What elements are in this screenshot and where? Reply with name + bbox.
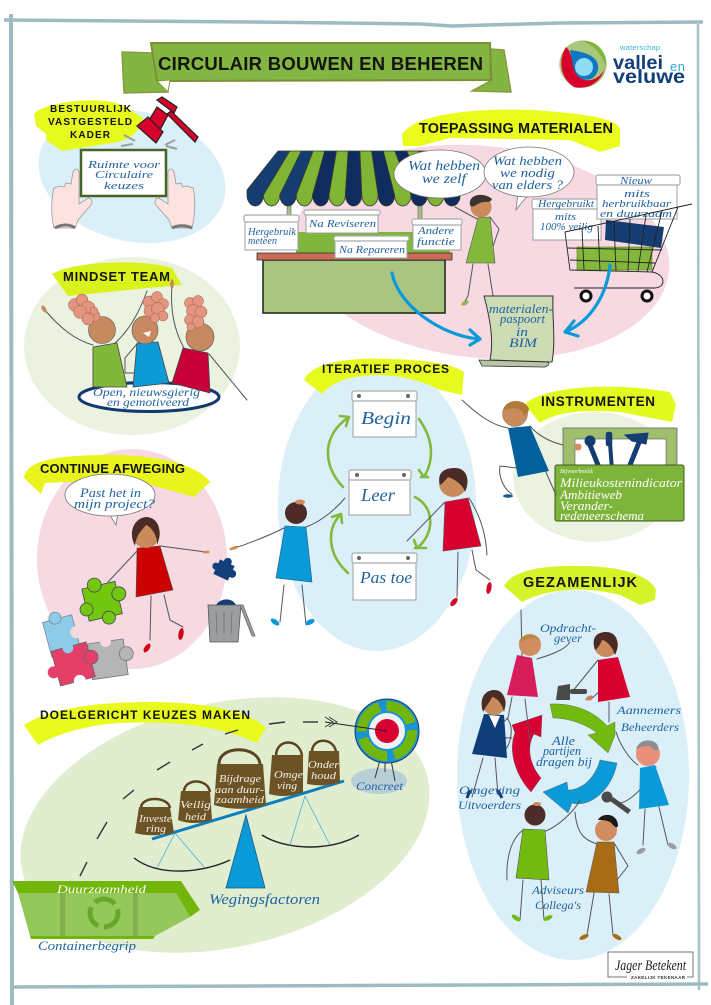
weight: omgeving xyxy=(269,742,303,796)
container: duurzaamheid: Duurzaamheid xyxy=(56,882,147,896)
weight: investering xyxy=(135,799,174,835)
toolbox front with text: Milieukostenindicator xyxy=(559,475,683,490)
credit: Jager Betekent: Jager Betekent xyxy=(615,958,687,974)
role labels xyxy=(458,621,681,912)
arrow: cart to passport xyxy=(565,265,610,336)
center text: alle partijen dragen bij: Alle xyxy=(551,733,575,748)
panel: bestuurlijk vastgesteld kader xyxy=(24,90,240,262)
heading: KADER xyxy=(70,130,111,141)
market stall xyxy=(244,151,462,313)
person: red learner xyxy=(407,468,493,607)
person: blue xyxy=(125,292,169,387)
speech bubble: past het in mijn project xyxy=(65,474,156,525)
highlight xyxy=(504,566,656,605)
icon: trash can xyxy=(208,599,255,642)
role labels: Opdracht- xyxy=(540,621,596,635)
heading: DOELGERICHT KEUZES MAKEN xyxy=(40,708,250,722)
label: nieuw mits herbruikbaar en duurzaam: mits xyxy=(624,188,650,200)
person: red xyxy=(170,279,247,400)
icon: wrench xyxy=(602,792,631,814)
highlight xyxy=(24,702,266,745)
heading: ITERATIEF PROCES xyxy=(322,362,449,376)
oval caption xyxy=(79,382,219,412)
strike marks xyxy=(121,135,177,149)
role labels: gever xyxy=(554,631,582,645)
label: na repareren xyxy=(334,236,409,258)
title banner xyxy=(122,43,511,93)
label: hergebruik meteen xyxy=(244,215,299,250)
role labels: Beheerders xyxy=(621,720,679,734)
person: red with puzzle xyxy=(108,517,210,654)
icon: recycle xyxy=(90,899,118,927)
scroll: materialenpaspoort in BIM: paspoort xyxy=(499,312,546,326)
arrow: blue cycle xyxy=(543,760,617,813)
person: green xyxy=(40,291,147,387)
weight: veiligheid: heid xyxy=(185,811,207,823)
logo: waterschap Vallei en Veluwe: vallei xyxy=(613,53,663,74)
scroll: materialenpaspoort in BIM xyxy=(479,296,554,367)
weight: bijdrage aan duurzaamheid: Bijdrage xyxy=(219,773,261,785)
toolbox front with text: redeneerschema xyxy=(560,509,644,523)
panel: doelgericht keuzes maken xyxy=(0,659,455,991)
highlight xyxy=(525,387,676,423)
caption text: Open, nieuwsgierig xyxy=(93,385,200,399)
person: opdrachtgever xyxy=(500,610,570,742)
person: beheerder xyxy=(612,732,678,856)
label: na reviseren xyxy=(304,210,380,233)
arrows: cycle xyxy=(328,416,431,573)
card: pas toe xyxy=(352,553,417,600)
icon: hands xyxy=(52,169,195,228)
sign: Ruimte voor xyxy=(87,159,161,171)
card: begin xyxy=(352,391,417,437)
toolbox front with text: Bijvoorbeeld: xyxy=(560,469,594,475)
label: andere functie: Andere xyxy=(417,226,454,237)
speech bubble: wat hebben we nodig van elders: we nodig xyxy=(500,165,556,180)
highlight xyxy=(402,110,620,152)
shopping cart xyxy=(565,204,692,301)
weight: onderhoud: Onder xyxy=(308,760,340,771)
logo: waterschap Vallei en Veluwe xyxy=(559,40,685,88)
label: hergebruik meteen: meteen xyxy=(248,236,277,247)
speech bubble: wat hebben we zelf: we zelf xyxy=(422,172,468,187)
title: CIRCULAIR BOUWEN EN BEHEREN xyxy=(158,53,483,74)
logo: waterschap Vallei en Veluwe: waterschap xyxy=(619,43,660,52)
sign xyxy=(81,150,166,196)
heading: GEZAMENLIJK xyxy=(523,575,638,591)
label: nieuw mits herbruikbaar en duurzaam: en duurzaam xyxy=(600,208,672,220)
person: aannemer xyxy=(572,632,630,722)
label: andere functie xyxy=(412,219,462,250)
person: collega brown xyxy=(575,812,628,941)
puzzle piece: green xyxy=(74,572,132,630)
label: hergebruikt mits 100% veilig: 100% veilig xyxy=(540,222,593,233)
center text: alle partijen dragen bij: dragen bij xyxy=(536,754,592,769)
panel: continue afweging xyxy=(24,449,255,694)
card: leer: Leer xyxy=(360,485,396,505)
label: hergebruik meteen: Hergebruik xyxy=(247,227,297,238)
caption: containerbegrip: Containerbegrip xyxy=(38,939,136,953)
highlight xyxy=(304,359,464,395)
highlight xyxy=(34,100,143,151)
caption text: en gemotiveerd xyxy=(107,395,190,409)
weight: bijdrage aan duurzaamheid: aan duur- xyxy=(215,784,264,796)
icon: hammer xyxy=(556,684,587,700)
dashed trajectory xyxy=(80,722,318,876)
card: pas toe: Pas toe xyxy=(359,568,412,587)
panel: mindset team xyxy=(24,257,247,435)
heading: MINDSET TEAM xyxy=(63,269,170,284)
speech bubble: wat hebben we nodig van elders: Wat hebben xyxy=(493,153,562,168)
weight: omgeving: Omge xyxy=(274,770,303,781)
panel: gezamenlijk xyxy=(457,566,689,960)
toolbox front with text xyxy=(555,465,684,523)
person: blue pointing xyxy=(229,498,345,627)
scale xyxy=(134,781,359,908)
caption text xyxy=(93,385,200,409)
speech bubble: past het in mijn project: Past het in xyxy=(79,486,141,500)
speech bubble: past het in mijn project: mijn project? xyxy=(74,497,156,511)
role labels: Omgeving xyxy=(459,783,520,797)
icon: gavel xyxy=(137,97,198,143)
weight: bijdrage aan duurzaamheid: zaamheid xyxy=(215,794,265,806)
puzzle piece: light blue xyxy=(41,606,87,657)
container: duurzaamheid xyxy=(12,881,200,939)
role labels: Adviseurs xyxy=(531,883,584,897)
label: hergebruikt mits 100% veilig xyxy=(532,199,602,240)
scroll: materialenpaspoort in BIM: BIM xyxy=(509,335,538,350)
label: andere functie: functie xyxy=(417,237,455,248)
toolbox front with text: Ambitieweb xyxy=(559,487,622,502)
heading: CONTINUE AFWEGING xyxy=(40,461,185,476)
sign: Circulaire xyxy=(95,169,153,181)
card: begin: Begin xyxy=(361,408,411,428)
toolbox with tools xyxy=(563,428,677,470)
scroll: materialenpaspoort in BIM: in xyxy=(516,325,528,339)
arrow: red cycle xyxy=(512,715,542,792)
label: na repareren: Na Repareren xyxy=(338,245,405,256)
heading: BESTUURLIJK xyxy=(50,104,132,115)
puzzle piece: grey xyxy=(87,632,136,680)
panel: instrumenten xyxy=(462,387,684,542)
weight: omgeving: ving xyxy=(277,781,297,792)
heading: INSTRUMENTEN xyxy=(541,394,655,409)
toolbox front with text: Verander- xyxy=(560,499,613,513)
highlight xyxy=(24,455,210,497)
label: hergebruikt mits 100% veilig: mits xyxy=(555,212,576,223)
label: hergebruikt mits 100% veilig: Hergebruikt xyxy=(537,199,595,210)
label: nieuw mits herbruikbaar en duurzaam: Nieuw xyxy=(619,176,652,187)
role labels: Uitvoerders xyxy=(458,798,521,812)
card: leer xyxy=(349,470,411,515)
speech bubble: wat hebben we zelf xyxy=(394,150,486,198)
panel: toepassing materialen xyxy=(244,110,692,377)
target: concreet xyxy=(325,699,419,794)
role labels: Collega's xyxy=(535,898,581,912)
person: green thinker xyxy=(455,195,499,307)
role labels: Aannemers xyxy=(616,703,681,717)
logo: waterschap Vallei en Veluwe: en xyxy=(670,59,685,74)
person: blue with tools xyxy=(462,400,582,498)
target: concreet: Concreet xyxy=(356,781,404,793)
highlight xyxy=(52,262,182,296)
sign: keuzes xyxy=(104,180,144,192)
puzzle piece: navy xyxy=(209,553,241,583)
weight: investering: ring xyxy=(146,824,166,835)
person: adviseur green xyxy=(507,800,580,923)
puzzle piece: pink xyxy=(41,636,105,694)
credit: Jager Betekent: ZAKELIJK TEKENAAR xyxy=(631,975,686,980)
heading: VASTGESTELD xyxy=(48,117,132,128)
center text: alle partijen dragen bij: partijen xyxy=(542,743,581,758)
panel: iteratief proces xyxy=(229,359,493,651)
label: na reviseren: Na Reviseren xyxy=(308,219,376,230)
heading: TOEPASSING MATERIALEN xyxy=(419,121,613,137)
heading xyxy=(48,104,132,141)
credit: Jager Betekent xyxy=(608,952,693,980)
weight: onderhoud: houd xyxy=(311,771,337,782)
speech bubble: wat hebben we nodig van elders xyxy=(484,147,574,210)
arrow: stall to passport xyxy=(392,273,480,345)
person: omgeving navy xyxy=(467,690,512,798)
speech bubble: wat hebben we nodig van elders: van elders ? xyxy=(492,177,564,192)
center text: alle partijen dragen bij xyxy=(536,733,592,769)
speech bubble: wat hebben we zelf: Wat hebben xyxy=(408,159,480,174)
scroll: materialenpaspoort in BIM: materialen- xyxy=(489,302,553,316)
weight: investering: Investe xyxy=(138,814,173,825)
weight: bijdrage aan duurzaamheid xyxy=(214,750,266,809)
weight: onderhoud xyxy=(307,741,340,785)
arrow: green cycle xyxy=(550,704,615,753)
awning xyxy=(247,151,460,206)
weight: veiligheid xyxy=(178,782,212,823)
label: nieuw mits herbruikbaar en duurzaam: herbruikbaar xyxy=(602,198,672,210)
scale: Wegingsfactoren xyxy=(209,892,320,908)
label: nieuw mits herbruikbaar en duurzaam xyxy=(596,175,680,220)
weight: veiligheid: Veilig xyxy=(180,799,212,811)
logo: waterschap Vallei en Veluwe: veluwe xyxy=(613,67,685,88)
